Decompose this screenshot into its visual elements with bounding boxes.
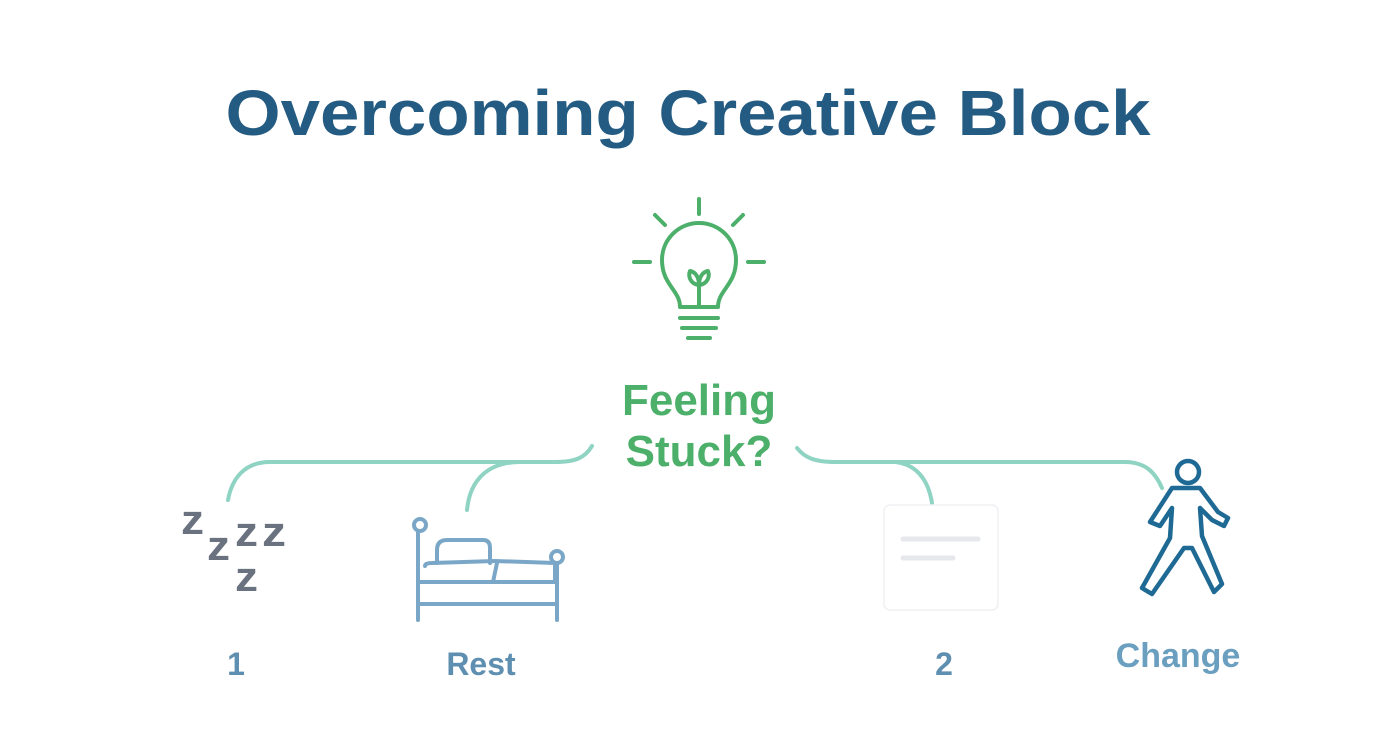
heading: Feeling Stuck?: Feeling xyxy=(622,376,776,425)
label: 2: 2 xyxy=(935,646,953,682)
icon: lightbulb xyxy=(634,199,764,338)
icon: bed xyxy=(414,519,563,620)
icon: zzz: z xyxy=(262,508,286,555)
icon: walking person xyxy=(1142,461,1228,594)
heading: Feeling Stuck? xyxy=(622,376,776,476)
icon: zzz xyxy=(181,496,286,600)
connector lines xyxy=(228,446,1162,510)
label: Rest: Rest xyxy=(446,646,516,682)
title: Overcoming Creative Block xyxy=(226,77,1151,149)
icon: zzz: z xyxy=(207,522,230,569)
icon: zzz: z xyxy=(235,553,258,600)
label: Change: Change xyxy=(1116,637,1240,675)
heading: Feeling Stuck?: Stuck? xyxy=(626,427,772,476)
icon: zzz: z xyxy=(181,496,204,543)
label: 1: 1 xyxy=(227,646,245,682)
icon: zzz: z xyxy=(235,508,258,555)
card placeholder xyxy=(884,505,998,610)
